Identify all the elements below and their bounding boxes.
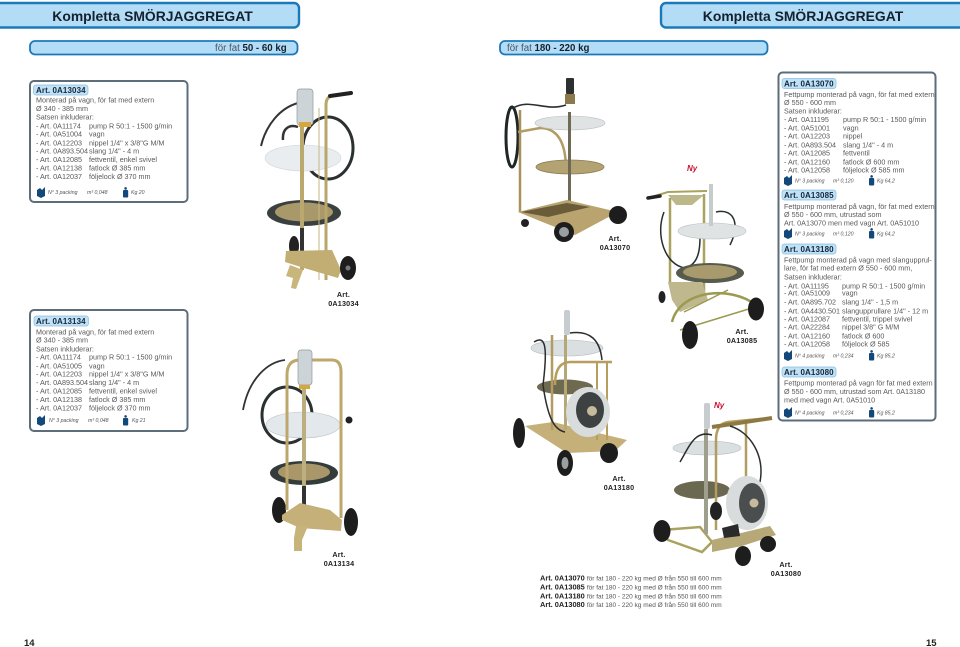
spec: Art. 0A13080: Kg 85,2 [877,410,895,416]
panel: Art. 0A13134: följelock Ø 370 mm [89,404,151,412]
spec: Art. 0A13085: N° 3 packing [795,232,825,238]
product photo: trolley 0A13134 [243,350,358,551]
spec: Art. 0A13180: följelock Ø 585 [842,340,890,348]
panel: Art. 0A13134: Kg 21 [132,418,146,424]
header: right page title: Kompletta SMÖRJAGGREGAT [703,8,904,24]
panel: Art. 0A13134: - Art. 0A51005 [36,362,82,370]
panel: Art. 0A13134: vagn [89,362,105,370]
spec: Art. 0A13180: Art. 0A13180 [784,245,834,254]
spec: Art. 0A13070: - Art. 0A51001 [784,124,830,132]
label: Art. 0A13134 [324,550,354,568]
product photo: trolley 0A13080 [654,403,776,566]
spec: Art. 0A13180 [782,244,932,361]
panel: Art. 0A13034: Ø 340 - 385 mm [36,104,88,113]
spec: Art. 0A13180: N° 4 packing [795,354,825,360]
panel: Art. 0A13134: - Art. 0A12085 [36,386,82,396]
spec: Art. 0A13180: - Art. 0A22284 [784,322,830,332]
drum size list: Art. 0A13085 för fat 180 - 220 kg med Ø från 550 till 600 mm [540,582,722,592]
panel: Art. 0A13034: - Art. 0A893.504 [36,146,88,156]
label: Art. 0A13070 [600,234,630,252]
panel: Art. 0A13034: fettventil, enkel svivel [89,155,157,164]
panel: Art. 0A13134: - Art. 0A12203 [36,370,82,378]
spec: Art. 0A13180: slang 1/4" - 1,5 m [842,298,898,306]
spec: Art. 0A13180: Satsen inkluderar: [784,272,842,282]
spec: Art. 0A13180: m³ 0,234 [833,354,854,360]
spec: Art. 0A13070 [782,78,935,186]
sub-header: drum size 50-60 kg [30,41,298,54]
panel: Art. 0A13034: Art. 0A13034 [36,86,86,95]
panel: Art. 0A13034: Kg 20 [131,190,145,196]
panel: Art. 0A13034: Satsen inkluderar: [36,112,94,122]
spec: Art. 0A13070: pump R 50:1 - 1500 g/min [843,115,926,124]
spec: Art. 0A13180: lare, för fat med extern Ø 550 - 600 mm, [784,264,912,272]
spec: Art. 0A13070: N° 3 packing [795,178,825,184]
panel: Art. 0A13034: - Art. 0A12037 [36,172,82,181]
panel: Art. 0A13034: - Art. 0A12085 [36,155,82,164]
product photo: trolley 0A13085 [648,184,764,349]
spec: Art. 0A13085 [782,190,935,239]
spec: Art. 0A13080: Ø 550 - 600 mm, utrustad som Art. 0A13180 [784,387,925,396]
product photo: trolley 0A13180 [513,310,627,476]
product photo: trolley 0A13034 [261,89,356,289]
spec: Art. 0A13180: pump R 50:1 - 1500 g/min [842,282,925,290]
panel: Art. 0A13134: Art. 0A13134 [36,317,86,326]
panel: Art. 0A13134: fatlock Ø 385 mm [89,395,145,404]
spec: Art. 0A13180: Fettpump monterad på vagn med slangupprul- [784,256,932,264]
panel: Art. 0A13134: - Art. 0A12037 [36,404,82,412]
label: Art. 0A13134: 0A13134 [324,559,354,568]
label: Art. 0A13034: 0A13034 [328,299,359,308]
spec: Art. 0A13070: följelock Ø 585 mm [843,166,905,174]
panel: Art. 0A13034 [30,81,188,202]
panel: Art. 0A13134: - Art. 0A12138 [36,395,82,404]
spec: Art. 0A13070: - Art. 0A12058 [784,166,830,174]
panel: Art. 0A13134: Ø 340 - 385 mm [36,336,88,344]
label: Art. 0A13180: 0A13180 [604,483,634,492]
panel: Art. 0A13034: - Art. 0A12138 [36,164,82,172]
header: left page title: Kompletta SMÖRJAGGREGAT [52,8,253,24]
panel: Art. 0A13034: N° 3 packing [48,190,78,196]
panel: Art. 0A13034: - Art. 0A51004 [36,130,82,138]
spec: Art. 0A13085: Art. 0A13085 [784,191,834,200]
panel: Art. 0A13134: Monterad på vagn, för fat med extern [36,328,154,336]
spec: Art. 0A13180: nippel 3/8" G M/M [842,322,899,332]
spec: Art. 0A13180: fatlock Ø 600 [842,332,884,340]
spec: Art. 0A13180: slangupprullare 1/4" - 12 m [842,306,928,316]
drum size list: Art. 0A13070 för fat 180 - 220 kg med Ø från 550 till 600 mm [540,574,722,582]
label: Art. 0A13080: Art. [779,560,793,569]
spec: Art. 0A13080 [782,367,933,418]
spec: Art. 0A13180: - Art. 0A12058 [784,340,830,348]
spec: Art. 0A13070: Fettpump monterad på vagn, för fat med extern [784,90,935,99]
spec: Art. 0A13070: Satsen inkluderar: [784,106,842,116]
panel: Art. 0A13134: m³ 0,048 [88,418,109,424]
label: Art. 0A13034: Art. [337,290,350,299]
drum size list: Art. 0A13180 för fat 180 - 220 kg med Ø från 550 till 600 mm [540,592,722,600]
spec: Art. 0A13085: m³ 0,120 [833,232,854,238]
panel: Art. 0A13134: fettventil, enkel svivel [89,386,157,396]
panel: Art. 0A13034: - Art. 0A12203 [36,138,82,148]
sub-header: drum size 50-60 kg: för fat 50 - 60 kg [215,43,287,54]
panel: Art. 0A13134: - Art. 0A11174 [36,352,81,362]
spec: Art. 0A13070: fatlock Ø 600 mm [843,158,899,166]
spec: Art. 0A13070: - Art. 0A12085 [784,148,830,158]
panel: Art. 0A13134: - Art. 0A893.504 [36,378,88,387]
drum size list: Art. 0A13080 för fat 180 - 220 kg med Ø från 550 till 600 mm [540,600,722,609]
panel: Art. 0A13134: pump R 50:1 - 1500 g/min [89,352,172,362]
spec: Art. 0A13080: N° 4 packing [795,410,825,416]
spec: Art. 0A13180: - Art. 0A12160 [784,332,830,340]
spec: Art. 0A13180: vagn [842,288,858,298]
panel: right specification column [778,72,936,420]
panel: Art. 0A13034: vagn [89,130,105,138]
label: Art. 0A13134: Art. [332,550,346,559]
label: Art. 0A13180 [604,474,634,492]
label: Art. 0A13080 [771,560,801,578]
panel: Art. 0A13134: nippel 1/4" x 3/8"G M/M [89,370,164,378]
label: Art. 0A13085: 0A13085 [727,336,757,345]
panel: Art. 0A13034: nippel 1/4" x 3/8"G M/M [89,138,164,148]
label: Art. 0A13085: Art. [735,327,749,336]
header: left page title [0,3,299,28]
spec: Art. 0A13080: Art. 0A13080 [784,368,834,377]
label: Art. 0A13070: Art. [608,234,622,243]
spec: Art. 0A13080: med med vagn Art. 0A51010 [784,396,875,404]
spec: Art. 0A13085: Kg 64,2 [877,232,895,238]
panel: Art. 0A13034: pump R 50:1 - 1500 g/min [89,122,172,130]
sub-header: drum size 180-220 kg: för fat 180 - 220 kg [507,43,589,54]
spec: Art. 0A13180: - Art. 0A895.702 [784,298,836,306]
header: right page title [661,3,960,28]
spec: Art. 0A13070: Art. 0A13070 [784,79,834,88]
panel: Art. 0A13034: följelock Ø 370 mm [89,172,151,181]
label: Art. 0A13080: 0A13080 [771,569,801,578]
spec: Art. 0A13070: vagn [843,124,859,132]
panel: Art. 0A13034: - Art. 0A11174 [36,122,81,130]
label: Art. 0A13034 [328,290,359,308]
panel: Art. 0A13134: slang 1/4" - 4 m [89,378,139,387]
spec: Art. 0A13070: - Art. 0A893.504 [784,140,836,150]
spec: Art. 0A13070: m³ 0,120 [833,178,854,184]
spec: Art. 0A13080: Fettpump monterad på vagn för fat med extern [784,378,933,388]
spec: Art. 0A13180: - Art. 0A12087 [784,314,830,324]
spec: Art. 0A13180: - Art. 0A51009 [784,288,830,298]
spec: Art. 0A13180: - Art. 0A4430.501 [784,306,840,316]
badge: Ny above 0A13085: Ny [687,164,698,173]
label: Art. 0A13085 [727,327,757,345]
panel: Art. 0A13034: Monterad på vagn, för fat med extern [36,96,154,104]
spec: Art. 0A13070: fettventil [843,148,870,158]
spec: Art. 0A13070: Kg 64,2 [877,178,895,184]
spec: Art. 0A13180: fettventil, trippel svivel [842,314,913,324]
spec: Art. 0A13085: Fettpump monterad på vagn, för fat med extern [784,202,935,211]
panel: Art. 0A13034: fatlock Ø 385 mm [89,164,145,172]
panel: Art. 0A13034: slang 1/4" - 4 m [89,146,139,156]
spec: Art. 0A13070: slang 1/4" - 4 m [843,140,893,150]
spec: Art. 0A13085: Art. 0A13070 men med vagn Art. 0A51010 [784,218,919,228]
spec: Art. 0A13070: Ø 550 - 600 mm [784,98,836,107]
panel: Art. 0A13134 [30,310,188,431]
label: Art. 0A13070: 0A13070 [600,243,630,252]
spec: Art. 0A13080: m³ 0,234 [833,410,854,416]
drum size list [540,574,722,609]
sub-header: drum size 180-220 kg [500,41,768,54]
badge: Ny above 0A13080: Ny [714,401,725,410]
label: Art. 0A13180: Art. [612,474,626,483]
product photo: trolley 0A13070 [506,78,627,242]
spec: Art. 0A13070: - Art. 0A11195 [784,115,829,124]
spec: Art. 0A13180: Kg 85,2 [877,354,895,360]
spec: Art. 0A13070: - Art. 0A12160 [784,158,830,166]
spec: Art. 0A13085: Ø 550 - 600 mm, utrustad som [784,210,881,219]
panel: Art. 0A13134: Satsen inkluderar: [36,344,94,354]
spec: Art. 0A13070: nippel [843,132,863,140]
panel: Art. 0A13034: m³ 0,048 [87,190,108,196]
spec: Art. 0A13180: - Art. 0A11195 [784,282,829,290]
spec: Art. 0A13070: - Art. 0A12203 [784,132,830,140]
panel: Art. 0A13134: N° 3 packing [49,418,79,424]
